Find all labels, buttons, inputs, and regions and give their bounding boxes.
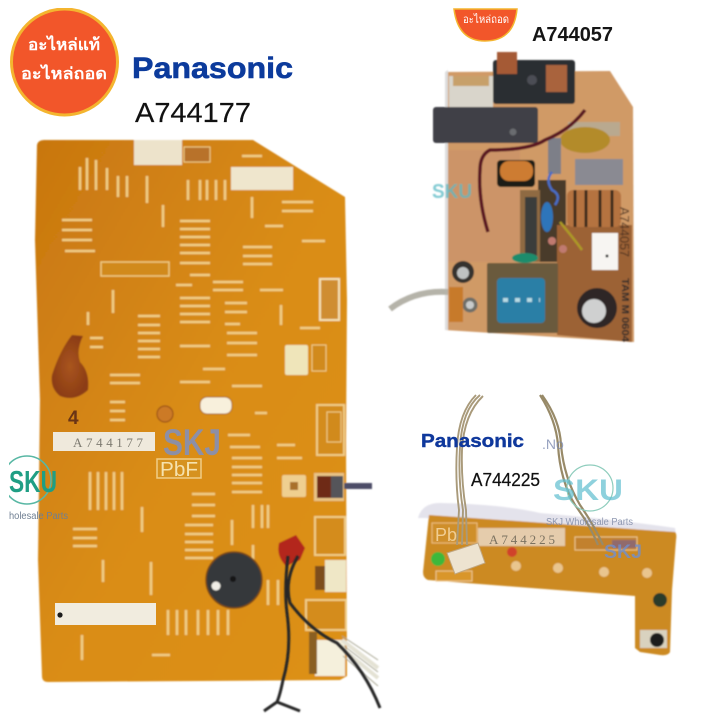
model number A744225: A744225: [471, 470, 540, 490]
capacitor: [653, 593, 667, 607]
white block: [592, 233, 618, 270]
copper coil: [567, 190, 621, 227]
PbF mark: PbF: [160, 459, 198, 481]
printed numeral: 4: [68, 408, 79, 429]
yellow and blue wires: [560, 222, 582, 250]
label: A744177: [53, 432, 155, 451]
watermark: SKU lower right: SKJ Wholesale Parts: [546, 517, 633, 528]
panel: power board A744057: [390, 52, 634, 342]
watermark: SKU left: holesale Parts: [9, 511, 68, 522]
red mark: [507, 547, 517, 557]
potentiometer: [640, 630, 667, 648]
watermark: SKU lower right: [546, 465, 633, 528]
watermark: SKJ on LED board: SKJ: [604, 542, 642, 563]
black wires: [264, 556, 380, 711]
toroid coil: [497, 160, 535, 187]
right wire bundle: [540, 395, 603, 545]
badge: genuine parts: [12, 9, 118, 115]
rotated print: A744057: [617, 207, 632, 257]
switch: [314, 473, 344, 501]
small inductors: [548, 237, 556, 245]
badge: used parts cropped: อะไหล่ถอด: [463, 13, 509, 26]
blank white label: [55, 603, 156, 625]
gold capacitor: [568, 122, 620, 136]
red wire: [480, 110, 585, 232]
white backing: [418, 503, 676, 536]
buzzer: [206, 552, 262, 608]
panel: main board A744177: [35, 140, 380, 711]
small pad block: [101, 262, 169, 276]
second connector: [231, 167, 293, 190]
grey cable: [390, 292, 448, 309]
watermark: SKU left: [9, 455, 68, 519]
red connector: [278, 535, 305, 566]
Pb mark: [432, 523, 477, 543]
left wire bundle: [456, 395, 483, 545]
right connector: [320, 279, 339, 320]
panel: LED board A744225: [418, 395, 676, 655]
connector outlines right: [317, 405, 344, 455]
brand logo: Panasonic lower: Panasonic: [421, 430, 524, 451]
Pb text: Pb: [435, 525, 457, 545]
footprint: [436, 571, 472, 581]
round mark: [157, 406, 173, 422]
top connector: [134, 140, 182, 165]
serial text: A744225: [489, 532, 555, 547]
faded note: No: .No: [542, 436, 564, 452]
model number A744177: A744177: [135, 97, 251, 128]
large black capacitor: [433, 107, 538, 143]
ferrite bar: [525, 197, 537, 257]
badge: genuine parts: อะไหล่ถอด: [21, 64, 107, 83]
badge: genuine parts: อะไหล่แท้: [28, 35, 100, 54]
transformer: [487, 263, 558, 333]
rotated print lot: TAM M 0604: [619, 278, 630, 342]
white wires: [342, 640, 378, 678]
label: A744177: A744177: [73, 435, 144, 450]
stain on board: [52, 335, 88, 398]
white connector: [449, 76, 493, 107]
watermark: SKU left: SKU: [9, 464, 57, 499]
blue capacitor: [541, 202, 553, 232]
grey bar: [548, 138, 561, 174]
small capacitors: [452, 261, 474, 283]
relay: [493, 60, 575, 104]
right connector: [575, 537, 637, 550]
grey filter box: [575, 159, 623, 185]
model number A744057: A744057: [532, 24, 613, 46]
serial label: [478, 528, 565, 546]
watermark: SKJ: SKJ: [163, 422, 221, 463]
middle white connector: [285, 345, 308, 375]
badge: used parts cropped: [454, 9, 517, 41]
green LED: [431, 552, 445, 566]
watermark: SKU power: SKU: [432, 181, 472, 203]
large electrolytic capacitor: [577, 288, 617, 328]
green capacitor: [512, 253, 538, 263]
crystal: [200, 397, 232, 414]
white wire connector: [447, 543, 485, 574]
LED pads: [511, 561, 521, 571]
brand logo: Panasonic: Panasonic: [132, 52, 293, 85]
orange connector: [449, 287, 463, 322]
watermark: SKU lower right: SKU: [553, 474, 623, 507]
